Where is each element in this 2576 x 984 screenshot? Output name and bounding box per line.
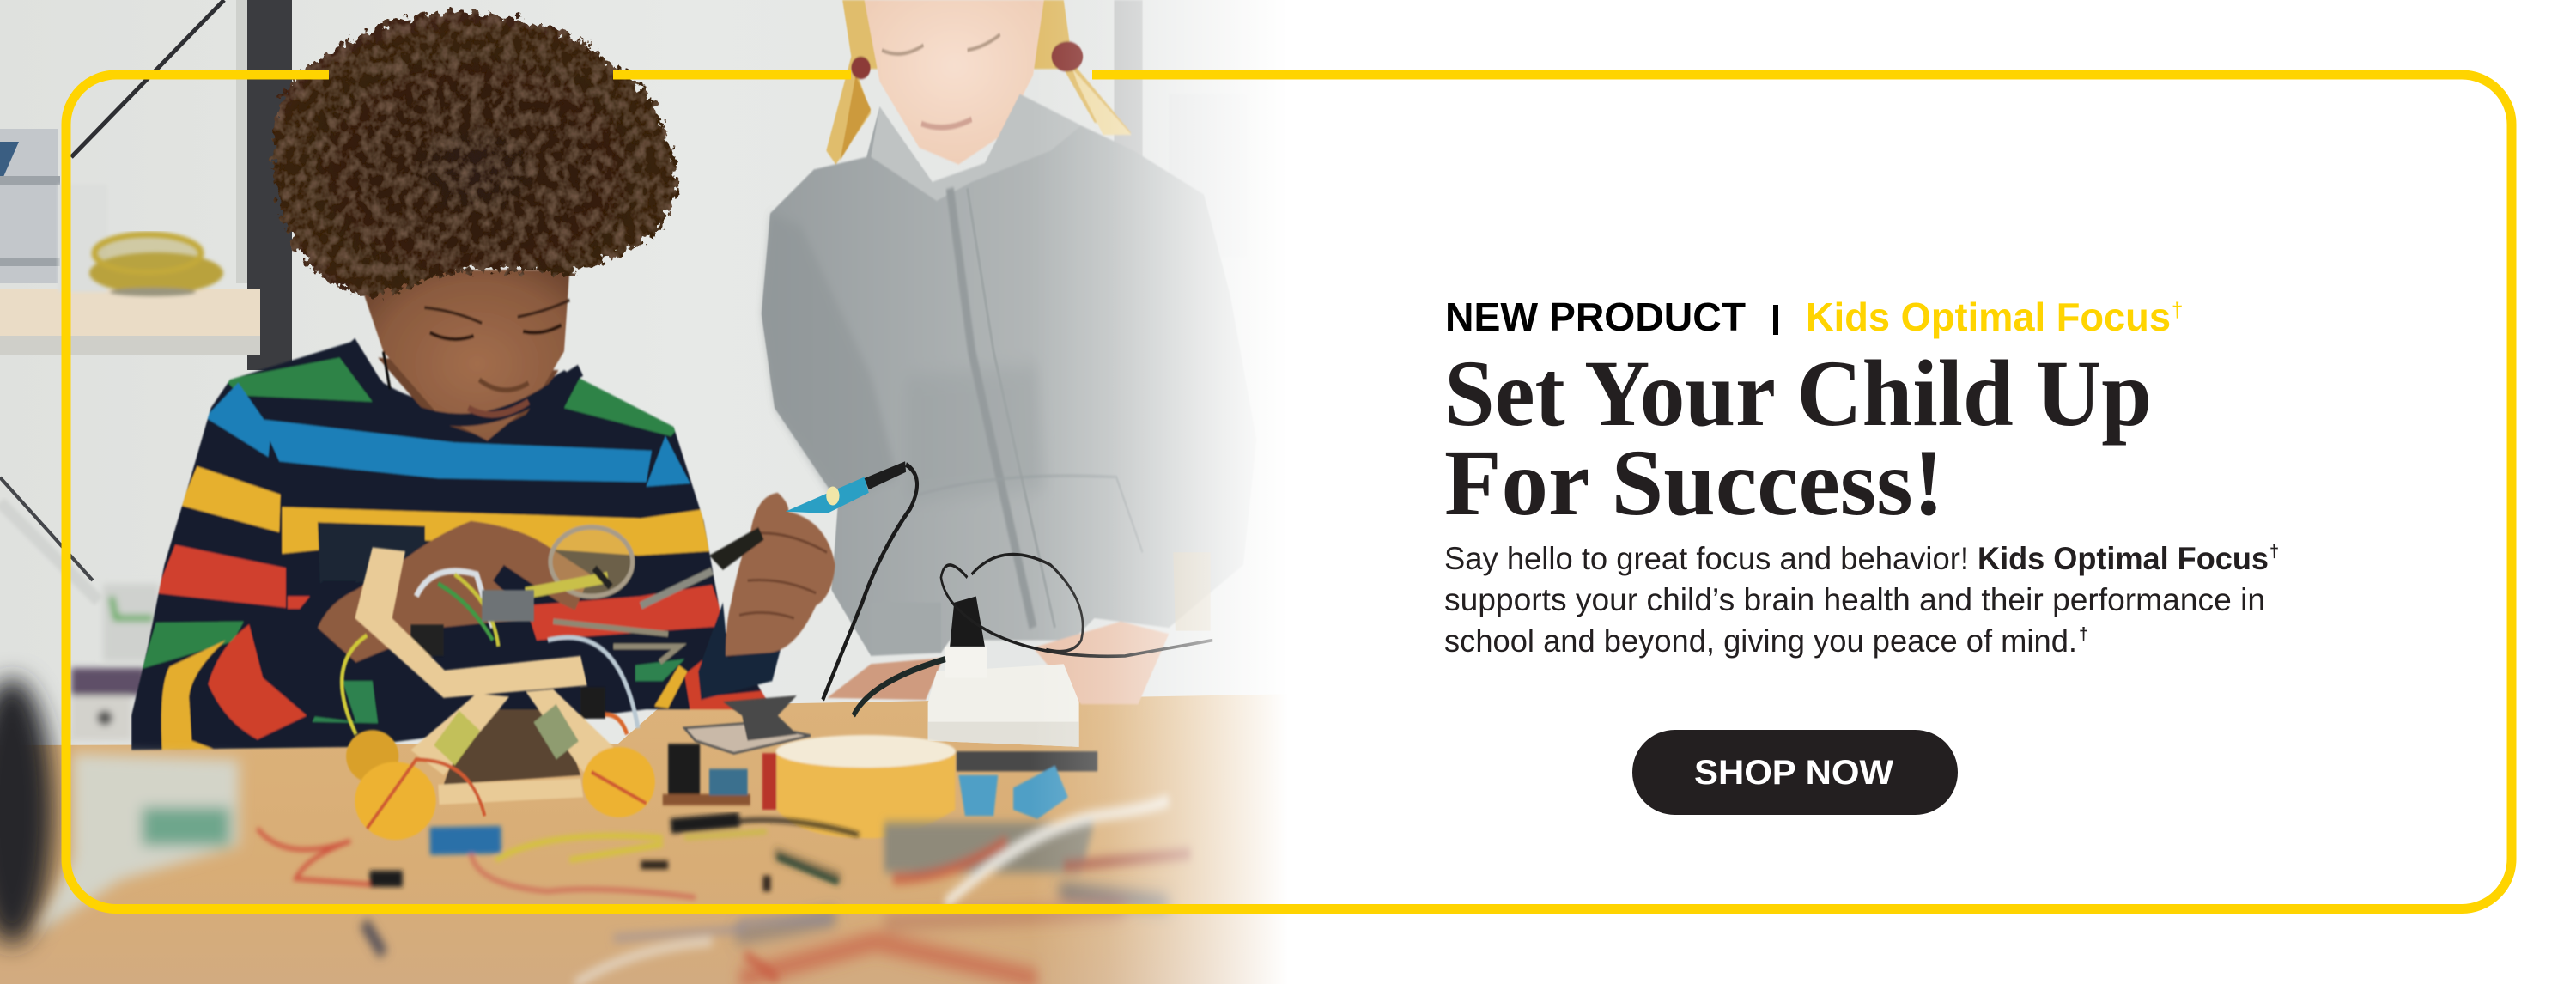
red stripes xyxy=(156,545,726,641)
soldering iron grip xyxy=(709,527,764,570)
hoodie xyxy=(762,94,1256,656)
white fade over the right of the photo xyxy=(1030,0,1288,984)
body line 1 bold: Kids Optimal Focus xyxy=(1978,541,2269,576)
scrunchies xyxy=(851,41,1083,79)
heading xyxy=(1444,341,2152,535)
button label: SHOP NOW xyxy=(1694,754,1893,792)
necklace xyxy=(383,351,390,389)
heading line 1: Set Your Child Up xyxy=(1444,341,2152,446)
shop now button xyxy=(1632,730,1958,815)
wooden chassis xyxy=(355,547,613,805)
dark blurred object at left edge xyxy=(0,678,53,945)
clear plastic box xyxy=(34,754,239,936)
body line 2: supports your child’s brain health and their performance in xyxy=(1444,582,2265,617)
heading line 2: For Success! xyxy=(1444,430,1944,535)
boy's eyes, brows, nose, lips xyxy=(424,300,569,415)
foreground wires in boy-side coordinates xyxy=(258,820,859,897)
boy's right hand xyxy=(726,493,835,656)
wall background xyxy=(0,0,1374,984)
soldering table xyxy=(0,694,1305,984)
dagger 3: † xyxy=(2079,625,2088,644)
blurred storage at lower left xyxy=(71,584,159,740)
grey box, white cable and red wires in girl-side coordinates xyxy=(775,800,1191,904)
right sleeve cuff xyxy=(698,603,784,700)
hoodie zip xyxy=(950,188,1033,628)
sleeve stripes xyxy=(161,641,226,750)
dagger 2: † xyxy=(2269,543,2279,562)
blue stripes xyxy=(205,383,690,487)
blurred foreground clutter xyxy=(0,678,1191,984)
soldering iron handle and cord xyxy=(786,461,1212,747)
girl hands xyxy=(827,658,943,700)
robot wires xyxy=(342,571,638,734)
robot car xyxy=(342,547,811,840)
dark interior behind chassis xyxy=(444,709,580,785)
girl hair xyxy=(826,0,1132,165)
girl face xyxy=(865,0,1044,165)
power strip with plug xyxy=(854,555,1212,747)
green stripes xyxy=(143,358,679,669)
afro hair xyxy=(273,12,677,298)
girl eyes and mouth xyxy=(882,34,1000,127)
shelving unit xyxy=(0,0,292,601)
body line 3: school and beyond, giving you peace of mind. xyxy=(1444,623,2077,659)
lower blurred wires xyxy=(735,891,1169,979)
soldering iron tip xyxy=(641,571,712,605)
girl in grey hoodie xyxy=(762,0,1256,704)
boy's striped sweater xyxy=(110,270,835,766)
background window post xyxy=(1114,0,1143,207)
coil of yellow wire xyxy=(89,234,223,296)
eyebrow line xyxy=(1445,295,2183,339)
yellow tape roll and table tools xyxy=(762,735,1097,838)
new product label: NEW PRODUCT xyxy=(1445,295,1746,339)
battery on the table xyxy=(1173,552,1211,631)
hoodie cuff xyxy=(871,603,941,653)
sweater pocket xyxy=(318,522,425,585)
neckline xyxy=(350,342,580,420)
shelf storage box xyxy=(0,129,58,283)
yellow stripes xyxy=(180,466,709,556)
photo: kids building a robot xyxy=(0,0,1274,984)
left sleeve cuff xyxy=(263,580,356,722)
body line 1: Say hello to great focus and behavior! xyxy=(1444,541,1969,576)
dagger: † xyxy=(2172,299,2183,322)
separator xyxy=(1773,305,1778,335)
boy's left hand xyxy=(318,521,591,662)
neck and face xyxy=(378,358,559,436)
circuit board parts xyxy=(663,744,750,805)
robot wheels xyxy=(346,730,655,840)
metal stand and phone xyxy=(684,695,811,753)
body copy xyxy=(1444,541,2279,659)
product name: Kids Optimal Focus xyxy=(1806,295,2171,339)
magnifier xyxy=(526,527,679,662)
